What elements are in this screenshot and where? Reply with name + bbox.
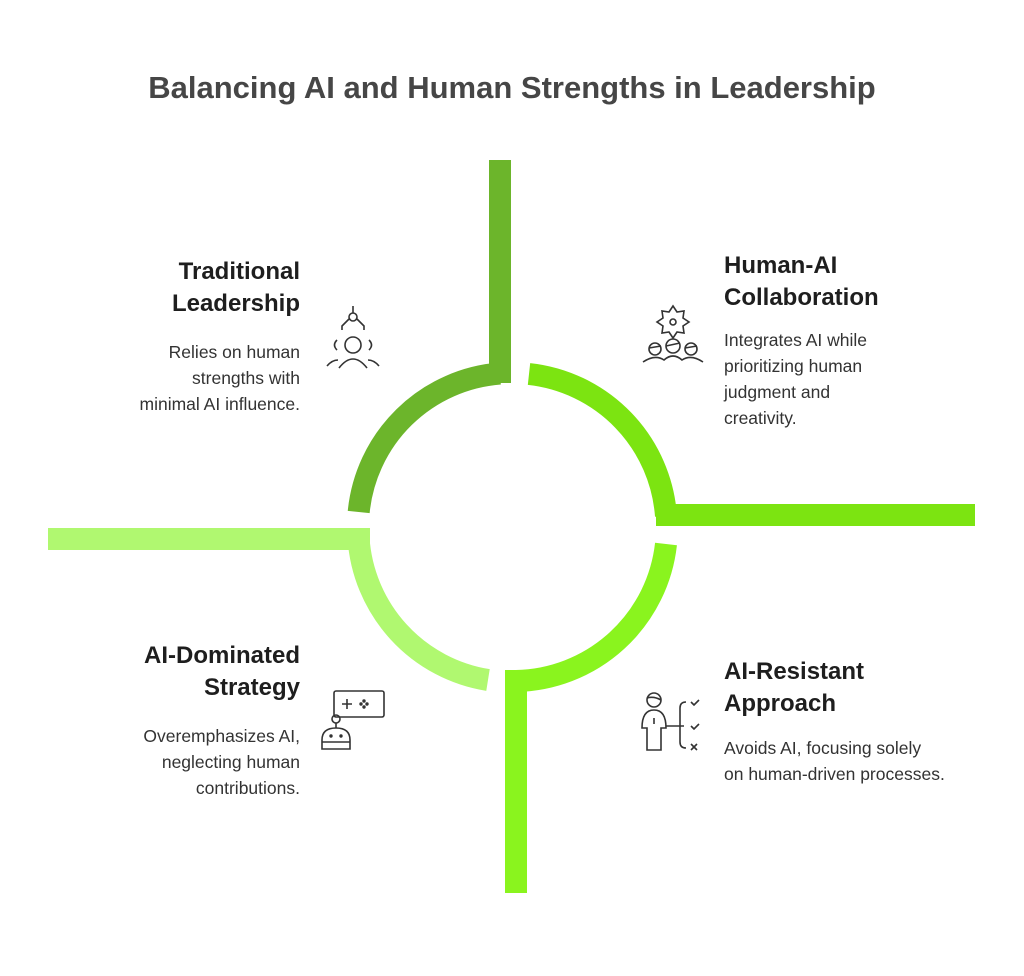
text: Human-AI Collaboration description: creativity. (724, 408, 797, 428)
text: AI-Dominated Strategy description (143, 726, 300, 798)
text: Human-AI Collaboration description: prioritizing human (724, 356, 862, 376)
quadrant: human-ai collaboration shape (529, 374, 975, 526)
heading: AI-Resistant Approach: Approach (724, 690, 836, 717)
text: AI-Dominated Strategy description: Overemphasizes AI, (143, 726, 300, 746)
title: Balancing AI and Human Strengths in Leadership (148, 70, 876, 105)
quadrant: ai-resistant approach shape (505, 544, 666, 893)
quadrant: traditional leadership shape (359, 160, 511, 512)
text: Human-AI Collaboration description: Integrates AI while (724, 330, 867, 350)
icon: person with checklist (641, 692, 700, 751)
icon: leader with robot arm (326, 306, 380, 368)
heading: Human-AI Collaboration (724, 252, 879, 311)
heading: Traditional Leadership (172, 258, 300, 317)
heading: AI-Dominated Strategy: AI-Dominated (144, 642, 300, 669)
heading: AI-Resistant Approach (724, 658, 864, 717)
heading: AI-Dominated Strategy: Strategy (204, 674, 300, 701)
text: Traditional Leadership description: minimal AI influence. (140, 394, 300, 414)
icon: robot with game screen (321, 690, 385, 750)
heading: Traditional Leadership: Leadership (172, 290, 300, 317)
heading: AI-Resistant Approach: AI-Resistant (724, 658, 864, 685)
text: Traditional Leadership description: Relies on human (169, 342, 300, 362)
text: Traditional Leadership description: strengths with (192, 368, 300, 388)
text: AI-Dominated Strategy description: contributions. (196, 778, 300, 798)
heading: Human-AI Collaboration: Collaboration (724, 284, 879, 311)
text: Human-AI Collaboration description: judgment and (724, 382, 830, 402)
text: AI-Dominated Strategy description: neglecting human (162, 752, 300, 772)
heading: AI-Dominated Strategy (144, 642, 300, 701)
icon: team with gear (642, 304, 704, 363)
heading: Human-AI Collaboration: Human-AI (724, 252, 837, 279)
heading: Traditional Leadership: Traditional (179, 258, 300, 285)
text: Human-AI Collaboration description (724, 330, 867, 428)
quadrant: ai-dominated strategy shape (48, 528, 488, 680)
text: AI-Resistant Approach description: on human-driven processes. (724, 764, 945, 784)
text: Traditional Leadership description (140, 342, 300, 414)
text: AI-Resistant Approach description: Avoids AI, focusing solely (724, 738, 921, 758)
text: AI-Resistant Approach description (724, 738, 945, 784)
